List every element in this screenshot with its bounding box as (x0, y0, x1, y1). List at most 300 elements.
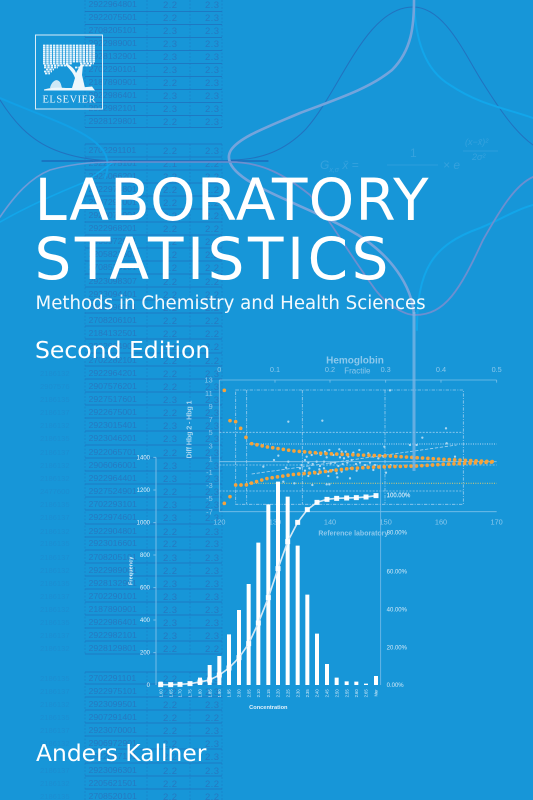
left y axis labels: 11 (205, 389, 213, 398)
background data table: 2.3 (205, 117, 219, 128)
background data table: 2.2 (205, 316, 219, 327)
background data table: 2.2 (205, 250, 219, 261)
bottom x axis labels: 140 (324, 517, 336, 526)
top fractile axis: 0 (217, 365, 221, 374)
category labels: 1.85 (207, 689, 212, 697)
background data table: 2.3 (205, 146, 219, 157)
background data table: 2.2 (163, 527, 177, 538)
background data table: 2.2 (205, 263, 219, 274)
left axis labels: 0 (147, 683, 151, 689)
background data table: 2186132 (40, 421, 70, 430)
category labels: 2.10 (256, 689, 261, 697)
chart: concentration histogram (129, 455, 411, 711)
background data table: 2186135 (40, 674, 70, 683)
background data table: 2.3 (205, 700, 219, 711)
background data table: 2.3 (163, 421, 177, 432)
background data table: 2186132 (40, 700, 70, 709)
left axis labels: 1200 (137, 488, 151, 494)
background data table: 2.2 (205, 211, 219, 222)
background data table: 2708205101 (88, 25, 137, 35)
background data table: 2.2 (163, 290, 177, 301)
background data table: 2.2 (205, 224, 219, 235)
background data table: 2186137 (40, 726, 70, 735)
background data table: 2.2 (163, 277, 177, 288)
background data table: 2.3 (205, 104, 219, 115)
background data table: 2186132 (40, 739, 70, 748)
background data table: 2186137 (40, 631, 70, 640)
left y axis labels: -1 (206, 468, 213, 477)
background data table: 2.3 (205, 369, 219, 380)
left y axis labels: -7 (206, 507, 213, 516)
left axis labels: 1400 (137, 455, 151, 461)
bottom x axis labels: 160 (435, 517, 447, 526)
background data table: 2.3 (163, 553, 177, 564)
background data table: 2922982101 (88, 630, 137, 640)
background data table: 2907576201 (88, 381, 137, 391)
top fractile axis: Fractile (344, 366, 371, 375)
background data table: 2186135 (40, 579, 70, 588)
background data table: 2922986401 (88, 90, 137, 100)
background data table: 2186135 (40, 618, 70, 627)
background data table: 2.3 (163, 434, 177, 445)
background data table: 2.2 (163, 779, 177, 790)
left y axis labels (205, 376, 213, 516)
background data table: 2708205101 (88, 552, 137, 562)
background data table: 2708206101 (88, 315, 137, 325)
background data table: 2.2 (205, 237, 219, 248)
background data table: 2186137 (40, 766, 70, 775)
background data table: 2906066001 (88, 460, 137, 470)
background data table: 2186132 (40, 644, 70, 653)
background data table: 2.2 (205, 290, 219, 301)
faint gaussian formula (320, 137, 498, 174)
background data table: 2187890901 (88, 77, 137, 87)
background data table: 2.2 (163, 185, 177, 196)
background data table: 2187890901 (88, 604, 137, 614)
left y axis labels: 9 (209, 402, 213, 411)
bottom x axis labels (213, 517, 503, 526)
category labels: 2.65 (364, 689, 369, 697)
background data table: 2.3 (205, 395, 219, 406)
category labels: 2.15 (266, 689, 271, 697)
background data table: 2.3 (205, 513, 219, 524)
category labels: 2.30 (295, 689, 300, 697)
background data table: 2.3 (163, 26, 177, 37)
background data table: 2.2 (163, 674, 177, 685)
background data table: 2907291001 (88, 197, 137, 207)
background data table: 2702290101 (88, 591, 137, 601)
background data table: 2923099501 (88, 699, 137, 709)
background data table: 2922986401 (88, 617, 137, 627)
category labels: 2.45 (325, 689, 330, 697)
background data table: 2.2 (205, 198, 219, 209)
category labels: 2.50 (334, 689, 339, 697)
background data table: 2186137 (40, 592, 70, 601)
background data table: 2.3 (205, 461, 219, 472)
top fractile axis: 0.1 (270, 365, 280, 374)
category labels: 1.90 (217, 689, 222, 697)
background data table: 2.3 (205, 579, 219, 590)
background data table: 2.3 (163, 605, 177, 616)
background data table: 2186132 (40, 474, 70, 483)
background data table: 2923046201 (88, 433, 137, 443)
background data table: 2.2 (205, 303, 219, 314)
background data table: 2.3 (205, 421, 219, 432)
category labels: 1.70 (178, 689, 183, 697)
background data table: 2.3 (205, 618, 219, 629)
background data table: 2.3 (163, 91, 177, 102)
bottom x axis labels: 130 (269, 517, 281, 526)
frequency label: Frequency (129, 557, 135, 585)
right axis labels: 60.00% (387, 569, 408, 575)
background data table: 2702293101 (88, 499, 137, 509)
background data table: 2.2 (163, 726, 177, 737)
background data table: 2.3 (205, 408, 219, 419)
background data table: 2923094401 (88, 289, 137, 299)
faint gaussian formula: x,σ (328, 167, 340, 174)
background data table: 2.3 (205, 687, 219, 698)
background data table: 2.3 (205, 553, 219, 564)
background data table: 2928129801 (88, 643, 137, 653)
background data table: 2.2 (205, 342, 219, 353)
background data table (40, 0, 222, 800)
plot frame (219, 380, 497, 512)
background data table: 2.2 (205, 713, 219, 724)
background data table: 2923015401 (88, 420, 137, 430)
bottom x axis labels: 150 (380, 517, 392, 526)
background data table: 2.2 (163, 78, 177, 89)
category labels: 2.40 (315, 689, 320, 697)
background data table: 2922964401 (88, 473, 137, 483)
background data table: 2922964901 (88, 341, 137, 351)
background data table: 2184132501 (88, 328, 137, 338)
background data table: 2.2 (163, 687, 177, 698)
background data table: 2702291101 (88, 145, 136, 155)
background data table: 2.3 (163, 104, 177, 115)
background data table: 2205621501 (88, 778, 137, 788)
background data table: 2186135 (40, 752, 70, 761)
background data table: 2928132901 (88, 51, 137, 61)
background data table: 2922982101 (88, 103, 137, 113)
y axis title: Diff: Diff Hbg 2 - Hbg 1 (184, 400, 194, 458)
background data table: 2186137 (40, 408, 70, 417)
left y axis labels: -5 (206, 494, 213, 503)
background data table: 2186132 (40, 461, 70, 470)
right axis labels (387, 493, 411, 689)
left axis labels: 600 (140, 586, 151, 592)
icon: Elsevier tree logo (36, 35, 102, 109)
tree trunk and ground (44, 63, 95, 90)
background data table: 2.2 (163, 700, 177, 711)
background data table: 2.3 (205, 91, 219, 102)
background data table: 2.2 (163, 566, 177, 577)
background data table: 2186137 (40, 687, 70, 696)
concentration label: Concentration (249, 705, 288, 711)
background data table: 2.3 (163, 395, 177, 406)
background data table: 2922968201 (88, 223, 137, 233)
background data table: 2922989001 (88, 38, 137, 48)
background data table: 2.2 (163, 766, 177, 777)
background data table: 2.2 (205, 644, 219, 655)
background data table: 2702291101 (88, 673, 136, 683)
left y axis labels: 5 (209, 428, 213, 437)
background data table: 2.3 (163, 461, 177, 472)
category labels: 2.55 (344, 689, 349, 697)
background data table: 2927517601 (88, 394, 137, 404)
left axis labels: 800 (140, 553, 151, 559)
background data table: 2.2 (163, 329, 177, 340)
background data table: 2923070901 (88, 210, 137, 220)
background data table: 2.2 (163, 644, 177, 655)
category labels: 1.60 (158, 689, 163, 697)
background data table: 2922904801 (88, 526, 137, 536)
background data table: 2.2 (205, 172, 219, 183)
background data table: 2186135 (40, 539, 70, 548)
subtitle: Methods in Chemistry and Health Sciences (36, 293, 426, 314)
edition: Second Edition (35, 336, 210, 364)
background data table: 2.3 (205, 739, 219, 750)
background data table: 2922075101 (88, 158, 137, 168)
icon: Elsevier tree logo: ELSEVIER (42, 94, 96, 106)
background data table: 2.3 (205, 0, 219, 11)
background data table: 2.3 (205, 726, 219, 737)
category labels: 1.65 (168, 689, 173, 697)
background data table: 2.3 (163, 513, 177, 524)
top fractile axis: 0.2 (325, 365, 335, 374)
top fractile axis: 0.3 (381, 365, 391, 374)
orange series (224, 390, 246, 503)
right axis labels: 0.00% (387, 683, 404, 689)
background data table: 2.2 (163, 739, 177, 750)
title second line: STATISTICS (34, 225, 388, 293)
category labels: 2.35 (305, 689, 310, 697)
background data table: 2186137 (40, 513, 70, 522)
background data table: 2922974801 (88, 184, 137, 194)
background data table: 2922964201 (88, 368, 137, 378)
background data table: 2186132 (40, 605, 70, 614)
left y axis labels: 7 (209, 415, 213, 424)
top fractile axis (217, 365, 502, 375)
background data table: 2.2 (163, 408, 177, 419)
background data table: 2.3 (205, 13, 219, 24)
background data table: 2.3 (205, 539, 219, 550)
background data table: 2.2 (163, 303, 177, 314)
background data table: 2.2 (163, 13, 177, 24)
title: LABORATORY (34, 166, 429, 234)
background data table: 2.3 (205, 766, 219, 777)
left axis labels: 1000 (137, 521, 151, 527)
bars (159, 482, 378, 685)
left axis labels (137, 455, 151, 689)
background data table: 2186137 (40, 448, 70, 457)
background data table: 2186137 (40, 553, 70, 562)
faint gaussian formula: (x−x̄)² (465, 137, 489, 147)
cumulative markers (161, 496, 376, 685)
background data table: 2.3 (163, 65, 177, 76)
background data table: 2.3 (205, 26, 219, 37)
background data table: 2922989001 (88, 565, 137, 575)
background data table: 2.2 (163, 224, 177, 235)
top fractile axis: 0.5 (492, 365, 502, 374)
right axis labels: 100.00% (387, 493, 411, 499)
background data table: 2.2 (163, 198, 177, 209)
background data table: 2.2 (163, 316, 177, 327)
background data table: 2.3 (205, 566, 219, 577)
background data table: 2.3 (205, 52, 219, 63)
background data table: 2.3 (205, 39, 219, 50)
background data table: 2.2 (163, 250, 177, 261)
left axis labels: 400 (140, 618, 151, 624)
bottom x axis labels: 120 (213, 517, 225, 526)
background data table: 2906972901 (88, 236, 137, 246)
background data table: 2.3 (205, 487, 219, 498)
category labels: 2.05 (246, 689, 251, 697)
background data table: 2922675001 (88, 407, 137, 417)
background data table: 2.2 (163, 172, 177, 183)
right axis labels: 40.00% (387, 607, 408, 613)
background data table: 2186135 (40, 500, 70, 509)
faint gaussian formula: G (320, 158, 329, 172)
background data table: 2.3 (163, 39, 177, 50)
top fractile axis: 0.4 (436, 365, 446, 374)
background data table: 2.3 (205, 674, 219, 685)
background data table: 2.3 (205, 448, 219, 459)
background data table: 2.2 (163, 237, 177, 248)
background data table: 2922065701 (88, 447, 137, 457)
background data table: 2.2 (205, 356, 219, 367)
background data table: 2.2 (163, 369, 177, 380)
background data table: 2923066201 (88, 171, 137, 181)
background data table: 2.2 (163, 356, 177, 367)
background data table: 2922975101 (88, 686, 137, 696)
background data table: 2.2 (205, 329, 219, 340)
background data table: 2.2 (205, 159, 219, 170)
background data table: 2.2 (163, 0, 177, 11)
right axis labels: 80.00% (387, 531, 408, 537)
background data table: 2.2 (163, 713, 177, 724)
background data table: 2.3 (163, 52, 177, 63)
background data table: 2922075501 (88, 12, 137, 22)
background data table: 2923098307 (88, 276, 137, 286)
left axis labels: 200 (140, 651, 151, 657)
background data table: 2186132 (40, 369, 70, 378)
background data table: 2.2 (163, 342, 177, 353)
background data table: 2927524901 (88, 486, 137, 496)
background data table: 2.3 (205, 631, 219, 642)
category labels: 1.75 (188, 689, 193, 697)
background data table: 2702282101 (88, 355, 137, 365)
background data table: 2186135 (40, 395, 70, 404)
background data table: 2.3 (205, 527, 219, 538)
background data table: 2.3 (163, 474, 177, 485)
x axis title: Reference laboratory (318, 531, 388, 538)
bottom x axis labels: 170 (491, 517, 503, 526)
background data table: 2.3 (205, 434, 219, 445)
scatter points (263, 390, 455, 485)
background data table: 2907291401 (88, 712, 137, 722)
background distribution curves (0, 0, 533, 330)
background data table: 2.1 (163, 159, 177, 170)
background data table: 2.2 (163, 382, 177, 393)
background data table: 2.2 (163, 211, 177, 222)
background data table: 2.2 (205, 277, 219, 288)
background data table: 2.3 (205, 474, 219, 485)
author: Anders Kallner (36, 739, 207, 767)
category labels: 1.95 (227, 689, 232, 697)
background data table: 2.3 (205, 382, 219, 393)
background data table: 2.2 (163, 146, 177, 157)
percentage callout: 100.00% (387, 494, 411, 500)
background data table: 2205821501 (88, 249, 137, 259)
chart title: Hemoglobin (326, 355, 384, 366)
category labels: 1.80 (198, 689, 203, 697)
background data table: 2906972901 (88, 738, 137, 748)
background data table: 2928132901 (88, 578, 137, 588)
faint gaussian formula: 2σ² (471, 152, 486, 162)
background data table: 2702290101 (88, 64, 137, 74)
category labels: Mer (374, 689, 379, 697)
background data table: 2923070001 (88, 725, 137, 735)
left y axis labels: 3 (209, 441, 213, 450)
background data table: 2928129801 (88, 116, 137, 126)
background data table: 2.2 (163, 263, 177, 274)
background data table: 2.2 (163, 117, 177, 128)
background data table: 2708520101 (88, 262, 137, 272)
background data table: 2186132 (40, 779, 70, 788)
faint gaussian formula: x̄ = (339, 158, 359, 172)
background data table: 2.3 (163, 592, 177, 603)
background data table: 2.3 (205, 752, 219, 763)
background data table: 2186135 (40, 713, 70, 722)
background data table: 2922974601 (88, 512, 137, 522)
background data table: 2477600 (40, 487, 70, 496)
cumulative curve (161, 496, 376, 685)
background data table: 2186132 (40, 527, 70, 536)
background data table: 2907576 (40, 382, 70, 391)
category labels: 2.00 (237, 689, 242, 697)
background data table: 2923096301 (88, 765, 137, 775)
background data table: 2.2 (163, 539, 177, 550)
background data table: 2.3 (163, 631, 177, 642)
category labels: 2.20 (276, 689, 281, 697)
right axis labels: 20.00% (387, 645, 408, 651)
background data table: 2.2 (163, 487, 177, 498)
background data table: 2.3 (205, 592, 219, 603)
background data table: 2.2 (163, 448, 177, 459)
background data table: 2.3 (205, 65, 219, 76)
tree canopy (43, 46, 95, 74)
category labels: 2.60 (354, 689, 359, 697)
background data table: 2186135 (40, 434, 70, 443)
background data table: 2186132 (40, 566, 70, 575)
background data table: 2923016601 (88, 538, 137, 548)
left y axis labels: 1 (209, 455, 213, 464)
left y axis labels: -3 (206, 481, 213, 490)
left y axis labels: 13 (205, 376, 213, 385)
category labels (158, 689, 379, 697)
background data table: 2922096301 (88, 302, 137, 312)
background data table: 2.3 (163, 618, 177, 629)
vertical pale axis of the curve (412, 312, 416, 471)
faint gaussian formula: 1 (410, 146, 417, 160)
background data table: 2.2 (163, 752, 177, 763)
background data table: 2.3 (205, 78, 219, 89)
background data table: 2.3 (205, 500, 219, 511)
background data table: 2.2 (205, 185, 219, 196)
background data table: 2.2 (205, 779, 219, 790)
background data table: 2.3 (205, 605, 219, 616)
background data table: 2922097101 (88, 751, 137, 761)
